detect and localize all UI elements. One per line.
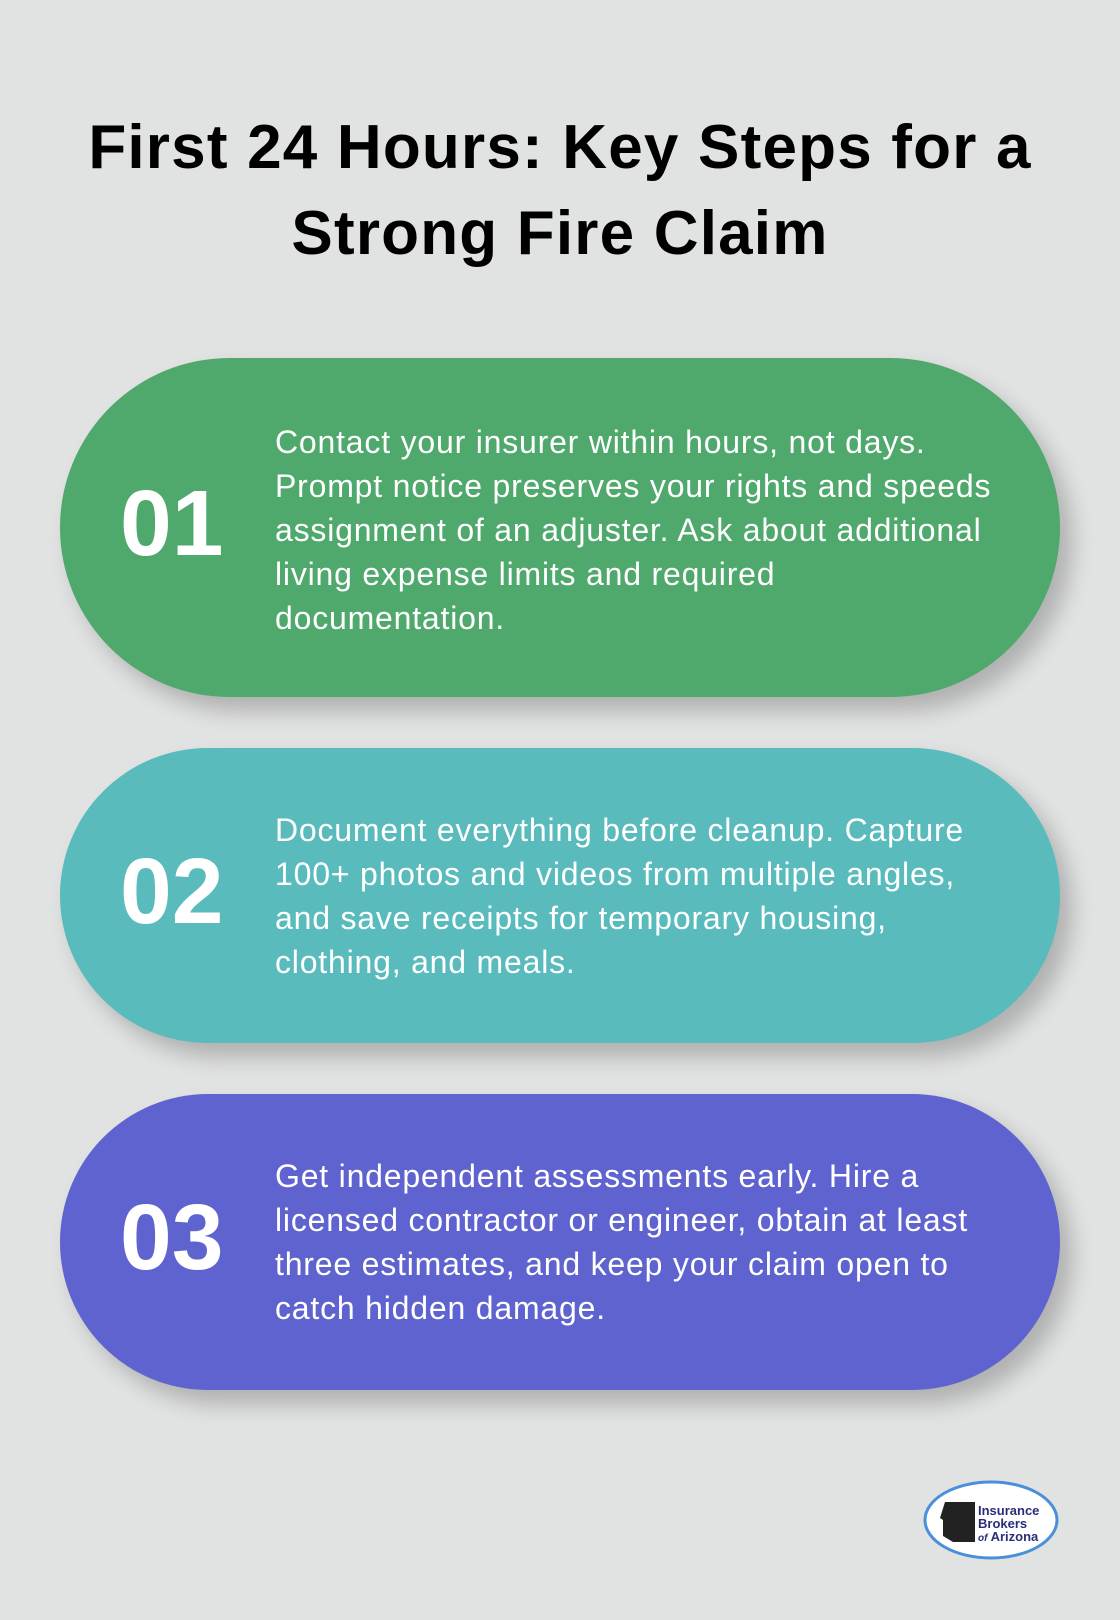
text 1: Prompt notice preserves your rights and speeds [275,468,991,504]
text 3 [275,1158,968,1326]
number 01: 01 [120,471,223,575]
text 2 [275,812,964,980]
text 1: living expense limits and required [275,556,775,592]
number 02: 02 [120,839,223,943]
logo [924,1480,1058,1560]
text 1: assignment of an adjuster. Ask about additional [275,512,982,548]
title: First 24 Hours: Key Steps for a [88,113,1032,182]
text 2: and save receipts for temporary housing, [275,900,887,936]
card 1 [60,358,1060,697]
text 3: three estimates, and keep your claim open to [275,1246,949,1282]
text 3: Get independent assessments early. Hire a [275,1158,919,1194]
text 2: 100+ photos and videos from multiple angles, [275,856,955,892]
text 2: clothing, and meals. [275,944,576,980]
card 2 [60,748,1060,1043]
text 2: Document everything before cleanup. Capture [275,812,964,848]
number 03: 03 [120,1185,223,1289]
title [88,113,1032,268]
text 1 [275,424,991,636]
text 1: Contact your insurer within hours, not days. [275,424,926,460]
logo: Insurance [978,1503,1039,1518]
logo: Brokers [978,1516,1027,1531]
text 3: catch hidden damage. [275,1290,606,1326]
text 3: licensed contractor or engineer, obtain at least [275,1202,968,1238]
text 1: documentation. [275,600,505,636]
title: Strong Fire Claim [291,199,829,268]
logo: of Arizona [978,1529,1039,1544]
card 3 [60,1094,1060,1390]
